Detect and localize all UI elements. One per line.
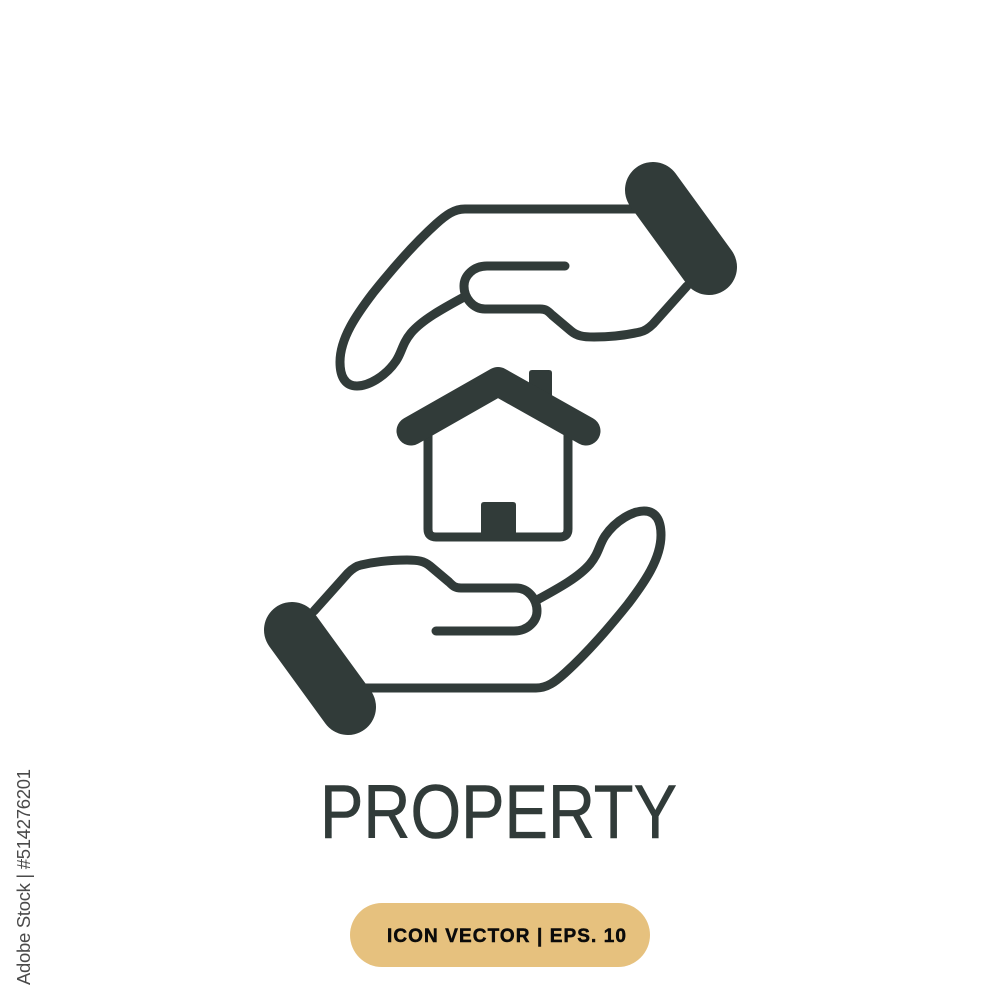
side credit text: Adobe Stock | #514276201 <box>13 769 34 985</box>
badge text: ICON VECTOR | EPS. 10 <box>387 926 626 947</box>
icon: lower hand <box>292 511 661 707</box>
badge: icon vector label <box>350 903 650 967</box>
house roof <box>411 382 586 431</box>
lower hand cuff <box>292 630 348 707</box>
icon: property emblem of two hands protecting a house <box>292 190 709 707</box>
house door <box>481 502 516 535</box>
badge pill <box>350 903 650 967</box>
house chimney <box>529 370 552 405</box>
lower hand finger <box>314 560 537 631</box>
icon: upper hand <box>340 190 709 386</box>
upper hand outline <box>340 209 640 386</box>
title: PROPERTY: PROPERTY <box>320 770 677 855</box>
upper hand finger <box>464 266 687 337</box>
lower hand outline <box>361 511 661 688</box>
house walls <box>428 430 568 537</box>
icon: house <box>411 370 586 537</box>
upper hand cuff <box>653 190 709 267</box>
